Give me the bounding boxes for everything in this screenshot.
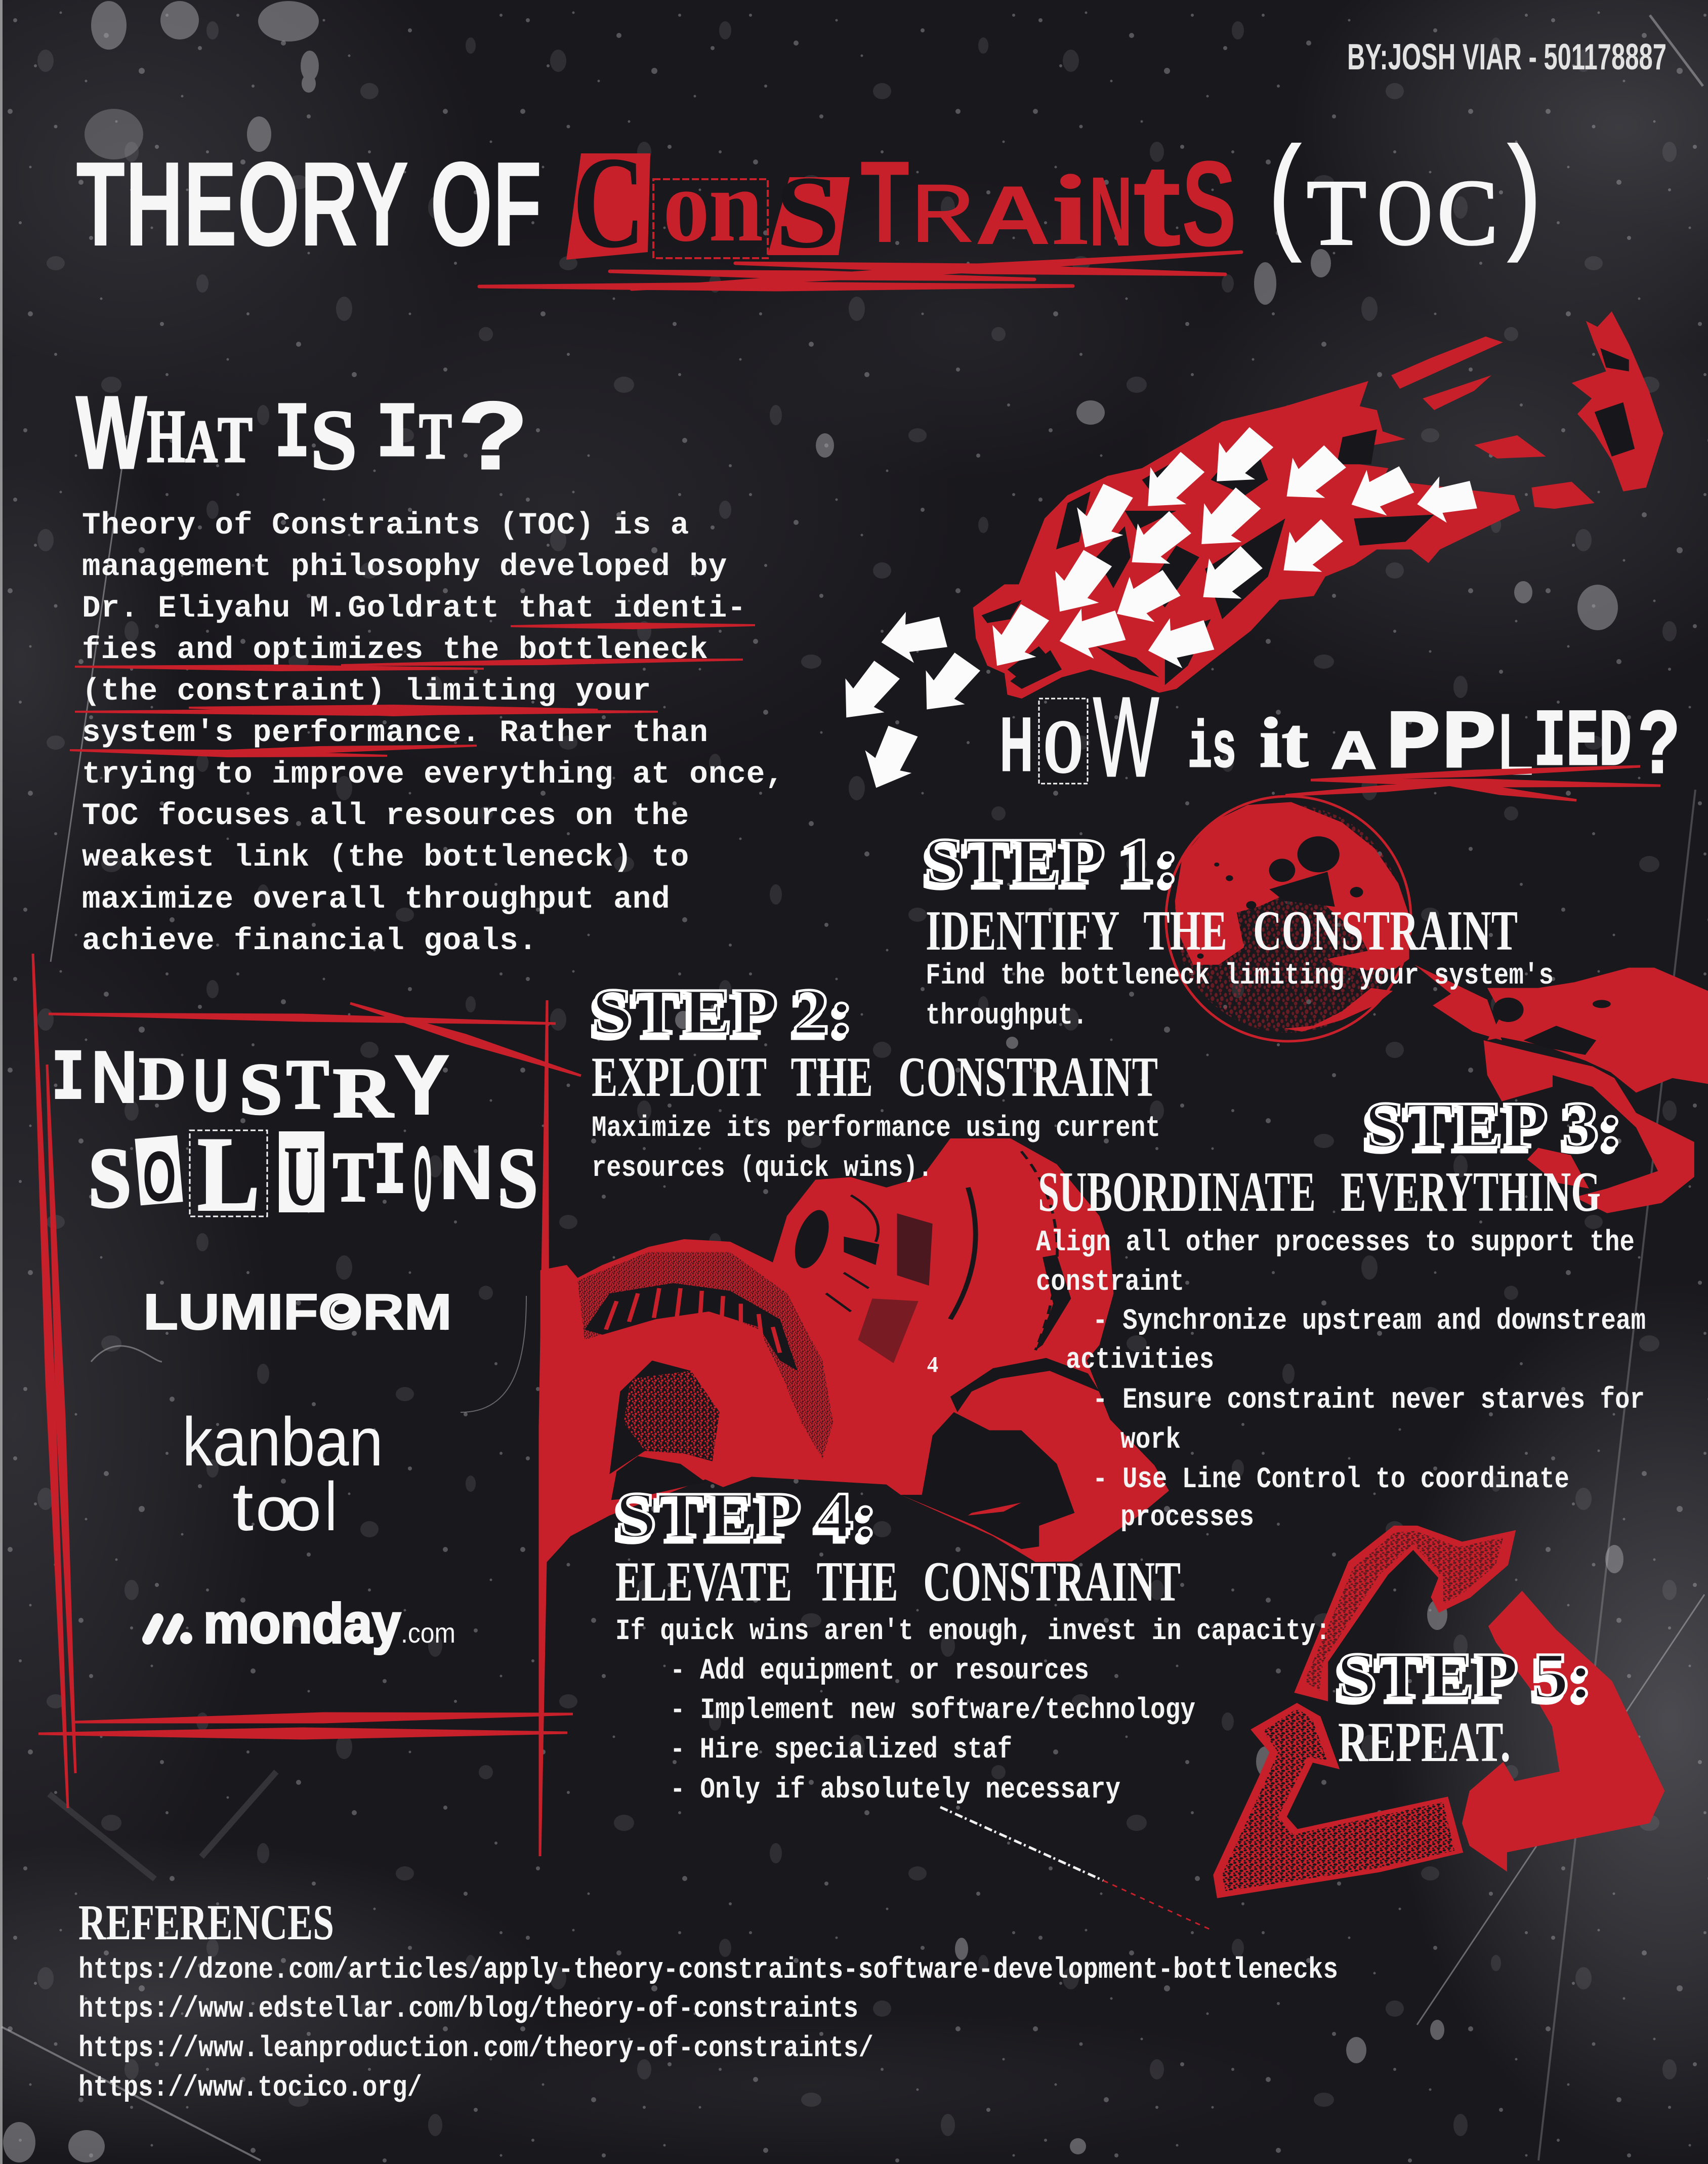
- title: Constraints: i: [1051, 154, 1089, 266]
- title: Constraints: S: [775, 155, 840, 270]
- heading: Industry: S: [239, 1049, 282, 1130]
- text block: what is it body: trying to improve everything at once,: [82, 757, 784, 792]
- step 4: [615, 1479, 1330, 1807]
- logo: Lumiform: LUMIFORM: [143, 1284, 452, 1340]
- heading letters: A: [1331, 721, 1377, 780]
- arrows flowing out of the constraint: [826, 418, 1479, 799]
- references heading: REFERENCES: [78, 1894, 334, 1950]
- title: dashed box: [653, 179, 768, 258]
- references list: https://www.edstellar.com/blog/theory-of-constraints: [78, 1993, 858, 2026]
- heading: Industry: U: [194, 1044, 228, 1126]
- heading letters: W: [1093, 674, 1159, 800]
- references list: [78, 1954, 1338, 2105]
- right arrow: [1462, 1590, 1664, 1872]
- title: Constraints: R: [909, 170, 975, 268]
- heading letters: PP: [1386, 698, 1497, 792]
- title: (TOC): (: [1269, 121, 1301, 262]
- title: red letter boxes: [566, 153, 850, 260]
- bottom-left arrow: [1215, 1704, 1462, 1898]
- step 5 heading: STEP 5:: [1337, 1640, 1593, 1712]
- hand: [1487, 968, 1708, 1092]
- step 3 text: - Use Line Control to coordinate: [1093, 1463, 1569, 1496]
- title: Constraints: n: [709, 148, 763, 263]
- illustration: red gears: [540, 1138, 1169, 1569]
- text block: what is it body: fies and optimizes the bottleneck: [82, 633, 709, 668]
- step 1 text: Find the bottleneck limiting your system's: [926, 960, 1554, 993]
- title: (TOC): O: [1378, 161, 1432, 265]
- heading: Solutions: I: [373, 1131, 406, 1214]
- step 3 text: work: [1120, 1424, 1181, 1457]
- heading: What Is It?: I: [376, 390, 419, 479]
- illustration: red bottleneck machine: [826, 311, 1663, 799]
- step 4 heading: STEP 4:: [615, 1479, 878, 1552]
- logo: monday.com: monday: [203, 1593, 401, 1655]
- heading: What Is It?: W: [76, 375, 147, 491]
- references: [78, 1894, 1338, 2105]
- heading letters: IED: [1533, 698, 1632, 789]
- heading: What Is It?: T: [419, 400, 452, 473]
- heading letters: L: [1497, 697, 1533, 793]
- step 1: [924, 825, 1554, 1033]
- step 3: [1036, 1089, 1646, 1534]
- step 3 text: activities: [1066, 1344, 1214, 1377]
- title: Constraints: t: [1133, 140, 1182, 270]
- step 3 text: [1036, 1227, 1646, 1534]
- panel: industry solutions: [33, 954, 581, 1856]
- title: Constraints: A: [975, 169, 1051, 262]
- title: [76, 121, 1541, 290]
- step 4 text: [615, 1615, 1330, 1807]
- heading: How is it applied?: [1000, 674, 1680, 800]
- heading: Solutions: S: [497, 1130, 538, 1226]
- heading: Industry: I: [52, 1039, 85, 1120]
- text block: what is it body: system's performance. Rather than: [82, 716, 709, 751]
- title: Constraints: T: [860, 137, 909, 267]
- step 2 title: EXPLOIT THE CONSTRAINT: [592, 1046, 1158, 1109]
- step 4 text: - Implement new software/technology: [670, 1694, 1195, 1727]
- text block: what is it body: Dr. Eliyahu M.Goldratt that identi-: [82, 591, 746, 626]
- title: (TOC): ): [1508, 121, 1541, 262]
- logo: kanban tool: o: [285, 1475, 321, 1543]
- illustration: magnifying glass and hand: [1166, 796, 1708, 1213]
- title: Constraints: N: [1089, 156, 1133, 267]
- step 2 heading: STEP 2:: [592, 975, 854, 1048]
- step 5 title: REPEAT.: [1338, 1711, 1511, 1774]
- step 3 text: constraint: [1036, 1266, 1184, 1299]
- step 5: [1337, 1640, 1593, 1774]
- references list: https://www.leanproduction.com/theory-of-constraints/: [78, 2032, 873, 2065]
- step 4 text: - Hire specialized staf: [670, 1734, 1012, 1767]
- heading: What Is It?: I: [274, 390, 310, 479]
- text block: what is it body: Theory of Constraints (TOC) is a: [82, 508, 689, 543]
- text block: what is it body: [82, 508, 784, 959]
- title: (TOC): T: [1307, 161, 1366, 265]
- heading: Solutions: O: [143, 1136, 176, 1216]
- tile around O: [1039, 699, 1088, 784]
- red hand-drawn frame: [33, 954, 581, 1856]
- red underline: [1285, 766, 1660, 800]
- text block: what is it body: maximize overall throughput and: [82, 882, 671, 917]
- heading letters: it: [1260, 704, 1308, 782]
- step 4 text: - Only if absolutely necessary: [670, 1774, 1120, 1807]
- step 4 text: - Add equipment or resources: [670, 1655, 1089, 1688]
- heading: Industry: N: [90, 1039, 139, 1125]
- heading: Solutions: U: [284, 1128, 319, 1223]
- logo: kanban tool: t: [232, 1468, 254, 1545]
- heading: Solutions: T: [333, 1138, 373, 1216]
- text block: what is it body: (the constraint) limiting your: [82, 674, 651, 709]
- decorative scratch line with red tail: [940, 1807, 1211, 1930]
- step 1 text: [926, 960, 1554, 1033]
- heading: Solutions: O: [414, 1128, 432, 1229]
- logo: monday.com: [148, 1593, 455, 1655]
- heading: Industry: D: [139, 1045, 186, 1112]
- heading letters: is: [1188, 712, 1236, 787]
- heading: Solutions: N: [437, 1133, 495, 1222]
- heading: What Is It?: T: [218, 403, 253, 476]
- title: (TOC): C: [1437, 161, 1498, 265]
- step 3 heading: STEP 3:: [1364, 1089, 1623, 1162]
- step 2: [592, 975, 1160, 1185]
- references list: https://dzone.com/articles/apply-theory-constraints-software-development-bottlenecks: [78, 1954, 1338, 1987]
- step 2 text: [592, 1112, 1160, 1185]
- step 4 text: If quick wins aren't enough, invest in capacity:: [615, 1615, 1330, 1648]
- heading: Industry: Y: [395, 1038, 449, 1131]
- step 3 text: processes: [1120, 1501, 1254, 1534]
- text block: what is it body: TOC focuses all resources on the: [82, 799, 689, 834]
- red underlines on body text: [70, 624, 755, 756]
- heading letters: H: [1000, 702, 1033, 787]
- heading: What Is It?: ?: [457, 382, 528, 489]
- step 2 text: resources (quick wins).: [592, 1152, 933, 1185]
- text block: what is it body: management philosophy developed by: [82, 550, 727, 585]
- logo: kanban tool: [182, 1403, 383, 1545]
- heading letters: ?: [1638, 693, 1680, 792]
- heading: What Is It?: H: [147, 394, 185, 478]
- text block: what is it body: achieve financial goals.: [82, 924, 537, 959]
- illustration: recycling triangle: [1215, 1526, 1664, 1898]
- title: THEORY OF: THEORY OF: [76, 137, 542, 271]
- step 2 text: Maximize its performance using current: [592, 1112, 1160, 1145]
- step 1 text: throughput.: [926, 1000, 1088, 1033]
- title: red scribbled underline: [479, 252, 1241, 290]
- step 1 heading: STEP 1:: [924, 825, 1180, 898]
- title: Constraints: C: [573, 130, 645, 275]
- gear teeth and speckle: [606, 1151, 1057, 1461]
- step 4 title: ELEVATE THE CONSTRAINT: [615, 1550, 1181, 1613]
- heading: Industry: R: [333, 1054, 394, 1132]
- letter tiles for Solutions: [135, 1130, 324, 1216]
- small number on gear: 4: [927, 1352, 938, 1377]
- logo: kanban tool: kanban: [182, 1403, 383, 1480]
- heading: Industry: T: [286, 1045, 329, 1124]
- logo: monday.com: .com: [401, 1617, 455, 1649]
- heading letters: O: [1044, 705, 1083, 789]
- heading: Solutions: L: [197, 1116, 260, 1233]
- text block: what is it body: weakest link (the bottleneck) to: [82, 840, 689, 875]
- references list: https://www.tocico.org/: [78, 2072, 422, 2105]
- logo: kanban tool: l: [325, 1468, 337, 1545]
- logo: kanban tool: o: [256, 1475, 292, 1543]
- heading: What Is It?: A: [185, 407, 218, 475]
- title: Constraints: S: [1182, 136, 1236, 271]
- heading: Solutions: S: [88, 1130, 132, 1226]
- heading: What Is It?: S: [310, 392, 357, 487]
- title: Constraints: o: [663, 148, 710, 263]
- top arrow: [1296, 1526, 1515, 1700]
